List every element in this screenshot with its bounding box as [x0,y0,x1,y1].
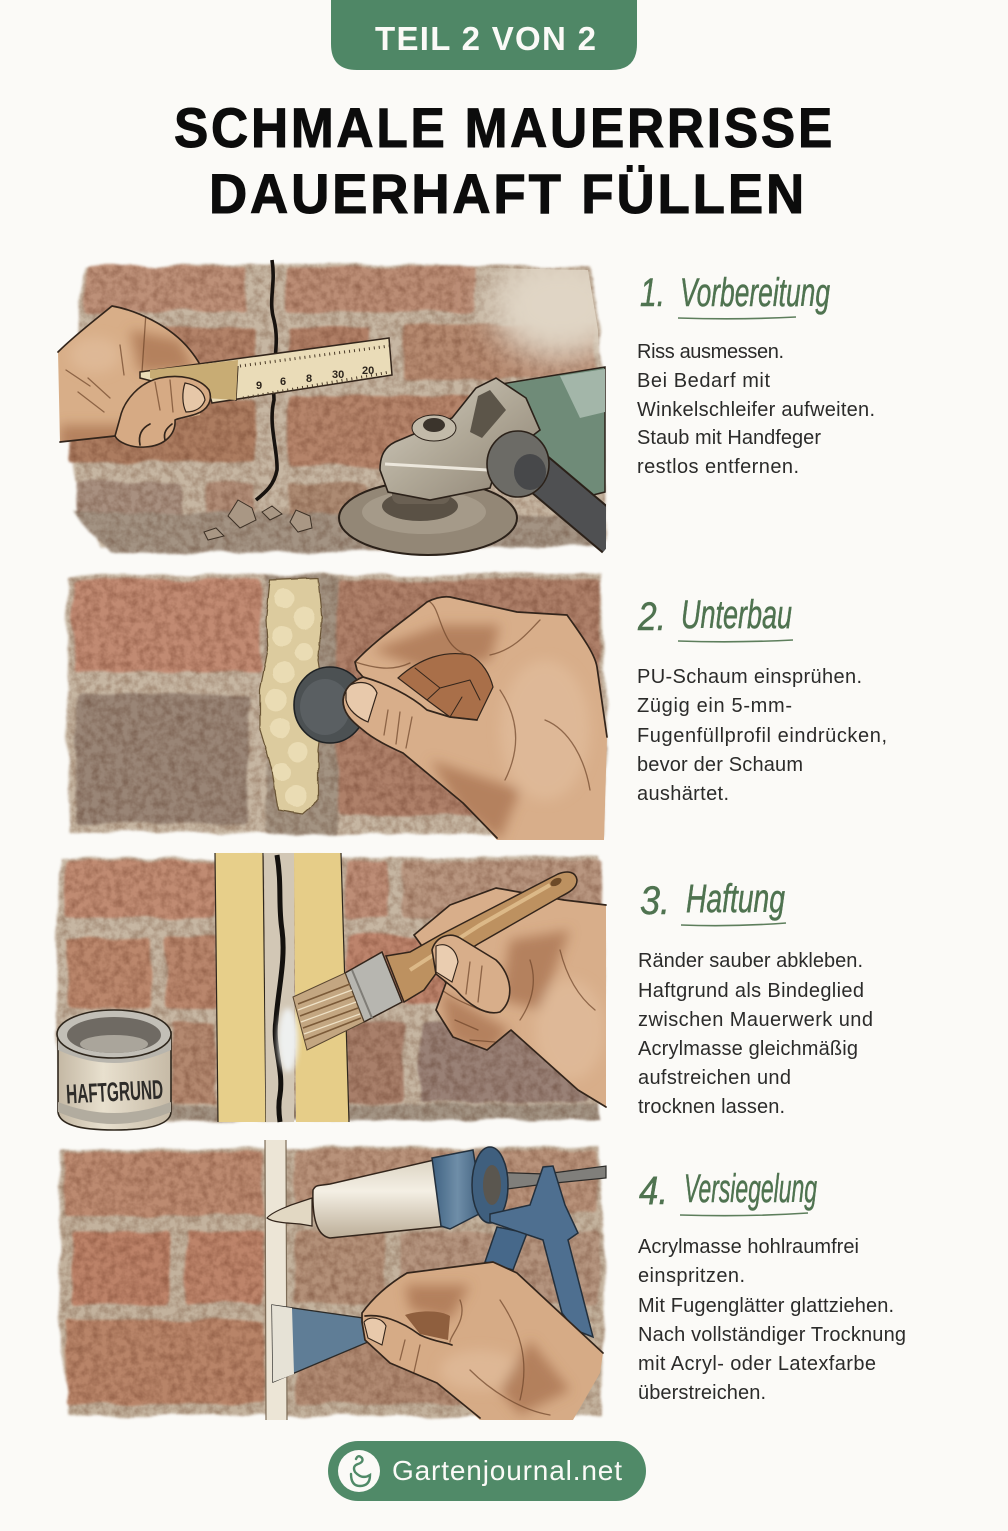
text: step 1 [637,341,875,478]
icon: brand logo [338,1450,380,1492]
brush handle [386,872,577,1002]
masking tape right [294,853,349,1122]
text: step 4: Nach vollständiger Trocknung [638,1324,906,1346]
gun main handle [490,1166,593,1337]
primer can [57,1010,171,1130]
text: step 1: restlos entfernen. [637,456,799,478]
filler profile disc [294,667,366,743]
grinder green motor [495,367,605,502]
heading: step 2: Unterbau [681,593,792,637]
folding ruler: 9 [256,380,262,392]
masking tape left [215,853,266,1122]
folding ruler: 8 [306,373,312,385]
grinder disc [339,481,517,555]
heading: step 2: 2. [637,595,666,639]
panel: step 3 illustration [56,853,610,1130]
title: DAUERHAFT FÜLLEN [209,162,807,225]
text: step 4 [638,1236,906,1404]
paint brush [293,872,577,1050]
hand behind brush [410,885,610,1110]
text: step 1: Winkelschleifer aufweiten. [637,399,875,421]
text: step 3: Ränder sauber abkleben. [638,950,863,972]
brush bristles [293,973,364,1050]
caulk tube [267,1160,448,1238]
hand pressing profile [340,590,610,845]
top tab: part label [331,0,637,70]
top tab: part label: TEIL 2 VON 2 [375,20,596,57]
text: step 3 [638,950,873,1118]
folding ruler: 6 [280,376,286,388]
grinder side handle [487,431,615,538]
heading: step 2 [637,593,793,642]
palm cavity [405,1311,450,1340]
text: step 2: Fugenfüllprofil eindrücken, [637,725,887,747]
text: step 1: Staub mit Handfeger [637,427,821,449]
can label: HAFTGRUND [65,1074,164,1109]
grinder metal head [380,378,540,500]
text: step 3: Acrylmasse gleichmäßig [638,1038,858,1060]
brush ferrule [345,952,402,1022]
palm cavity [398,654,493,720]
text: step 4: mit Acryl- oder Latexfarbe [638,1353,876,1375]
mortar joint with crack [264,853,294,1122]
title: SCHMALE MAUERRISSE [174,96,835,159]
text: step 1: Riss ausmessen. [637,341,784,363]
title [174,96,835,225]
text: step 4: einspritzen. [638,1265,745,1287]
caulking gun [432,1147,606,1337]
text: step 3: aufstreichen und [638,1067,791,1089]
gun blue collar [432,1147,508,1229]
thumb [364,1316,452,1345]
thumb over brush [432,935,510,1013]
thumb [343,677,477,748]
text: step 4: überstreichen. [638,1382,766,1404]
text: step 3: Haftgrund als Bindeglied [638,980,864,1002]
panel: step 1 illustration [50,250,630,555]
heading: step 1 [640,271,830,319]
heading: step 4: 4. [639,1169,668,1213]
heading: step 3 [640,877,786,926]
brick wall [66,574,606,836]
panel: step 4 illustration [58,1140,610,1425]
hand palm behind ruler [57,305,200,442]
rubble at wall base [204,500,312,540]
text: step 2 [637,666,887,805]
footer badge: brand: Gartenjournal.net [392,1455,622,1486]
folding ruler [140,338,392,403]
heading: step 4 [639,1167,817,1216]
brick wall with crack [66,262,606,552]
gun rod [484,1166,606,1192]
panel: step 2 illustration [66,574,610,845]
heading: step 1: Vorbereitung [680,271,830,315]
grinder [339,367,615,555]
wall crack [256,260,277,500]
text: step 2: PU-Schaum einsprühen. [637,666,862,688]
text: step 3: zwischen Mauerwerk und [638,1009,873,1031]
gun rear grip [485,1227,527,1270]
text: step 2: Zügig ein 5-mm- [637,695,792,717]
text: step 4: Acrylmasse hohlraumfrei [638,1236,859,1258]
brick wall [56,856,606,1122]
hand holding spatula [361,1261,604,1420]
heading: step 1: 1. [640,271,665,315]
primer patch [278,1008,298,1072]
PU foam [260,578,324,814]
folding ruler: 20 [362,365,374,377]
heading: step 3: 3. [640,879,670,923]
footer badge: brand [328,1441,646,1501]
sealed vertical joint [265,1140,287,1420]
text: step 4: Mit Fugenglätter glattziehen. [638,1295,894,1317]
heading: step 4: Versiegelung [684,1167,817,1211]
text: step 1: Bei Bedarf mit [637,370,770,392]
smoothing spatula [272,1305,368,1382]
text: step 2: bevor der Schaum [637,754,803,776]
text: step 2: aushärtet. [637,783,729,805]
thumb and fingers over ruler [60,376,210,447]
folding ruler: 30 [332,369,344,381]
faded wall top right [472,268,599,376]
brick wall [58,1146,606,1416]
heading: step 3: Haftung [686,877,785,921]
text: step 3: trocknen lassen. [638,1096,785,1118]
